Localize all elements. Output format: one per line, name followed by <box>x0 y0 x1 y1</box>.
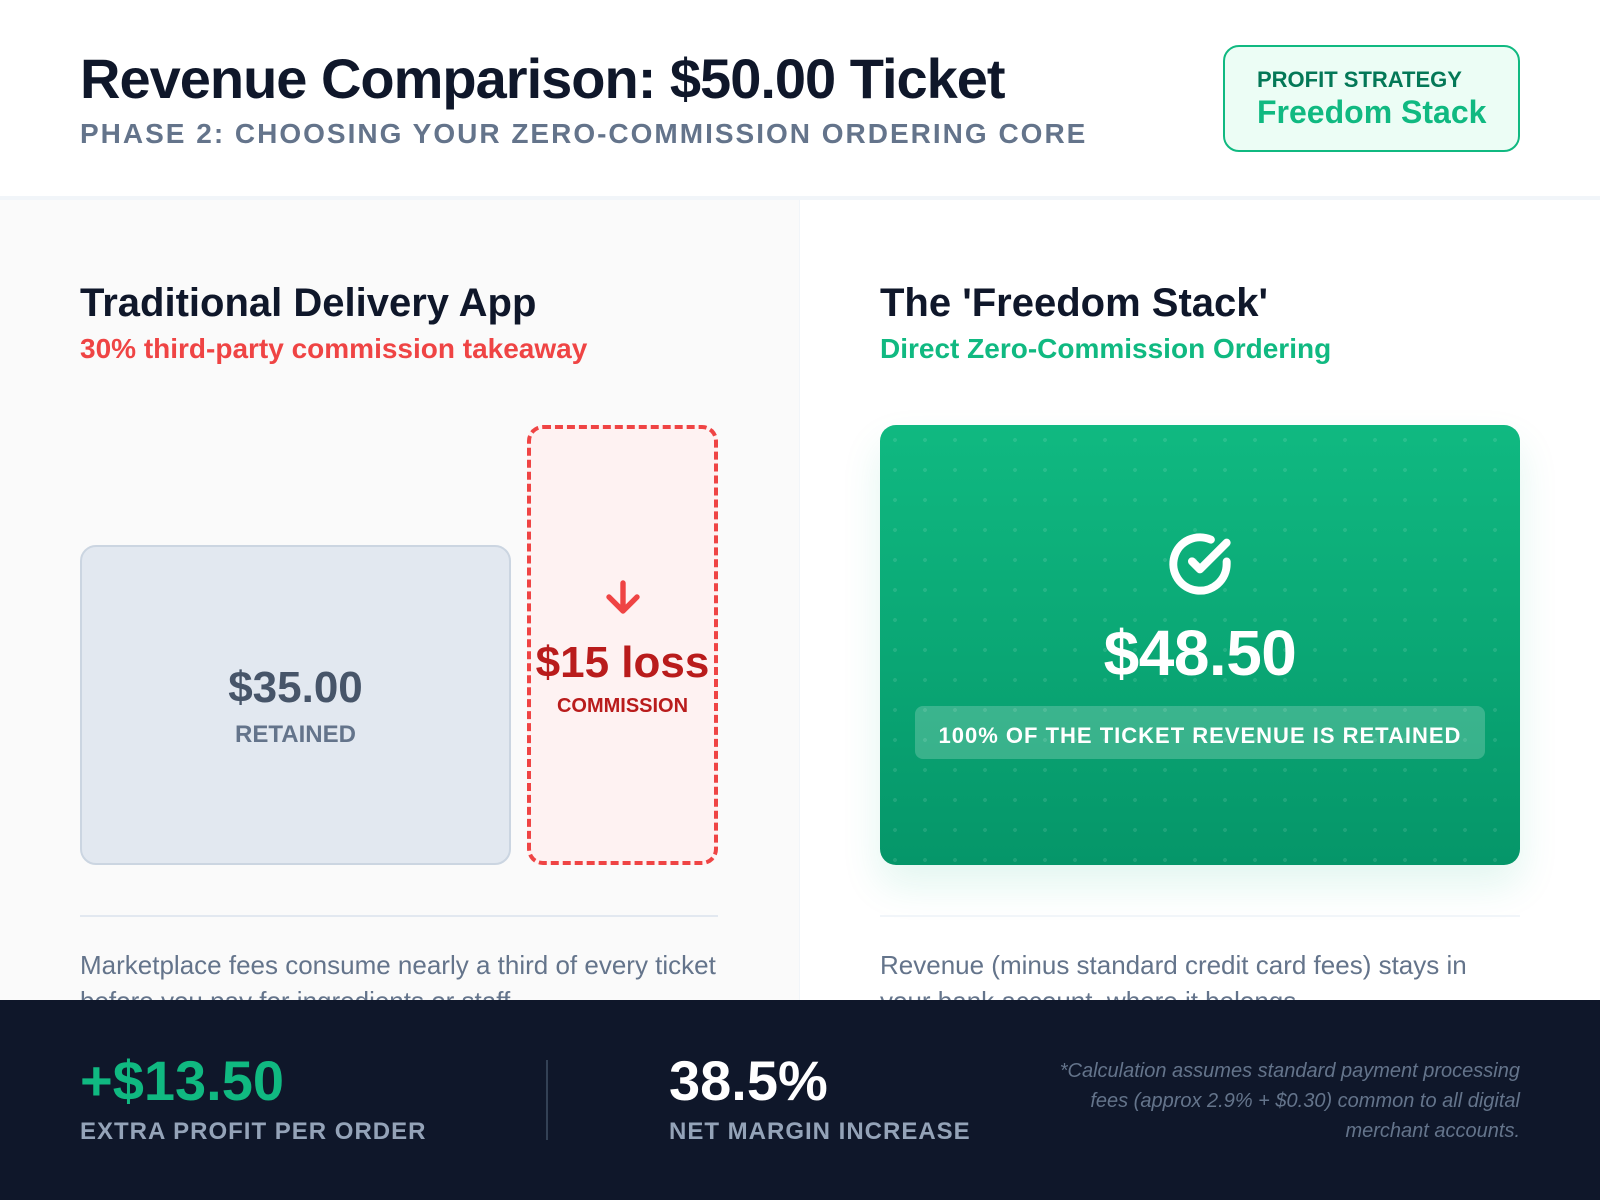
footnote: fees (approx 2.9% + $0.30) common to all digital <box>1090 1090 1520 1112</box>
panel subheading: 30% third-party commission takeaway <box>80 333 587 364</box>
panel description: Revenue (minus standard credit card fees) stays in <box>880 950 1467 980</box>
panel description <box>80 950 716 1000</box>
badge value: Freedom Stack <box>1257 94 1486 130</box>
retained label: RETAINED <box>235 721 356 748</box>
commission value: $15 loss <box>536 638 709 687</box>
green result card <box>880 425 1520 865</box>
footnote <box>1060 1060 1520 1142</box>
panel: traditional delivery app <box>0 200 800 1000</box>
divider <box>80 915 718 917</box>
stat label: NET MARGIN INCREASE <box>669 1118 971 1145</box>
panel description: Marketplace fees consume nearly a third of every ticket <box>80 950 716 980</box>
title: Revenue Comparison: $50.00 Ticket <box>80 47 1005 110</box>
stat value: 38.5% <box>669 1049 828 1112</box>
subtitle: PHASE 2: CHOOSING YOUR ZERO-COMMISSION ORDERING CORE <box>80 118 1087 149</box>
header <box>0 0 1600 200</box>
retained note pill <box>915 706 1485 759</box>
panel heading: The 'Freedom Stack' <box>880 281 1268 325</box>
footer divider <box>546 1060 548 1140</box>
dot pattern <box>880 425 1520 865</box>
stat: extra profit <box>80 1049 426 1145</box>
panel subheading: Direct Zero-Commission Ordering <box>880 333 1331 364</box>
stat label: EXTRA PROFIT PER ORDER <box>80 1118 426 1145</box>
panel description <box>880 950 1467 1000</box>
retained bar <box>80 545 511 865</box>
retained value: $35.00 <box>228 663 363 712</box>
panel: freedom stack <box>800 200 1600 1000</box>
commission bar <box>527 425 718 865</box>
badge label: PROFIT STRATEGY <box>1257 67 1462 92</box>
stat value: +$13.50 <box>80 1049 284 1112</box>
icon: down arrow <box>606 580 640 614</box>
icon: check circle <box>1169 533 1231 595</box>
panel heading: Traditional Delivery App <box>80 281 536 325</box>
footnote: *Calculation assumes standard payment processing <box>1060 1060 1520 1082</box>
footer <box>0 1000 1600 1200</box>
footnote: merchant accounts. <box>1345 1120 1520 1142</box>
retained value: $48.50 <box>1104 617 1296 689</box>
retained note pill: 100% OF THE TICKET REVENUE IS RETAINED <box>939 723 1461 748</box>
stat: net margin <box>669 1049 971 1145</box>
commission label: COMMISSION <box>557 695 688 717</box>
badge: profit strategy <box>1223 45 1520 152</box>
divider <box>880 915 1520 917</box>
